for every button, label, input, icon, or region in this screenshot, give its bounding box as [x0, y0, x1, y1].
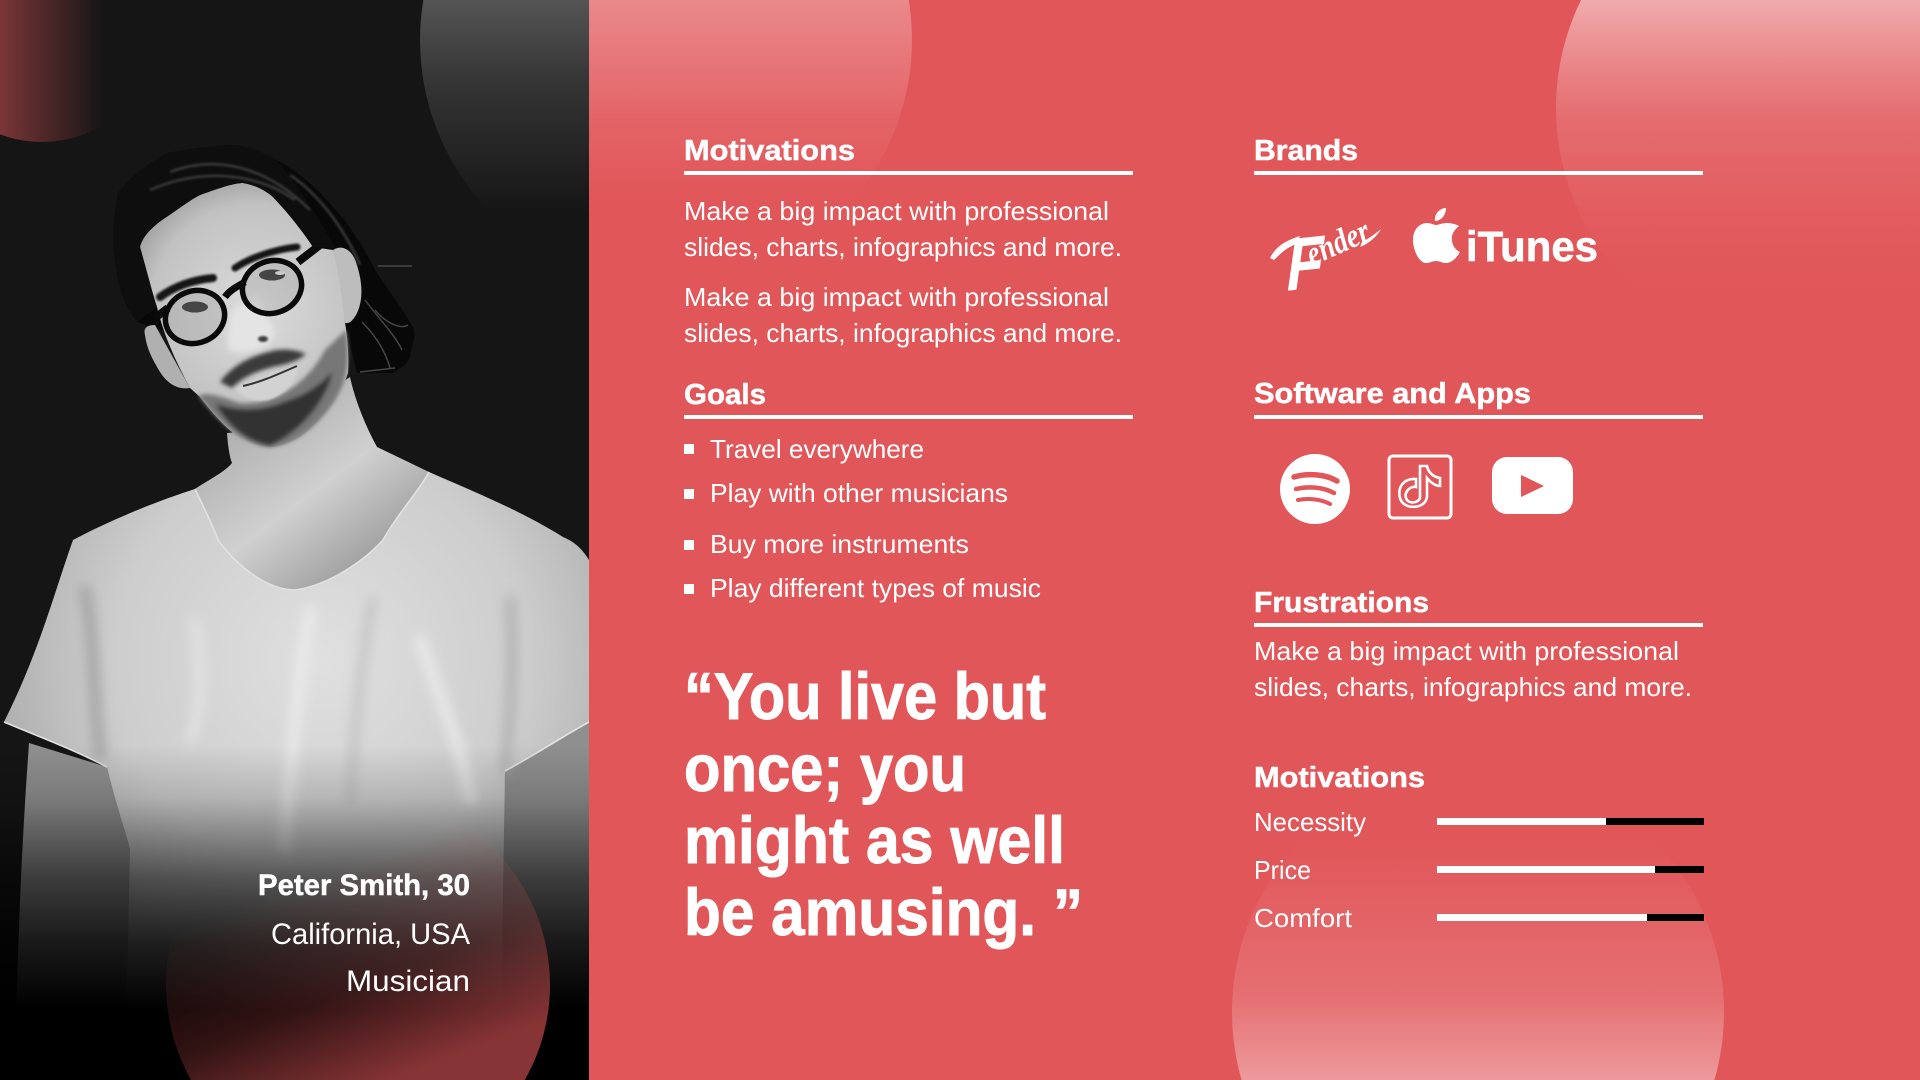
section: motivations text: slides, charts, infographics and more. — [684, 318, 1122, 348]
decorative circle: top right — [1556, 0, 1920, 354]
person details — [258, 869, 470, 998]
icon: Spotify — [1280, 454, 1350, 524]
heading: Software and Apps — [1254, 378, 1531, 410]
quote: might as well — [684, 803, 1065, 877]
name: Peter Smith, 30 — [258, 869, 470, 902]
section: goals — [684, 379, 1133, 603]
neck — [195, 377, 429, 590]
photo: man in white t-shirt — [4, 145, 589, 1080]
logo: Fender — [1270, 212, 1381, 308]
section: brands — [1254, 135, 1703, 308]
t-shirt — [4, 472, 589, 1080]
apple glyph — [1413, 208, 1460, 263]
quote: “You live but — [684, 659, 1046, 733]
shirt folds — [85, 590, 512, 850]
bar: necessity — [1254, 807, 1704, 837]
solid black base — [0, 1009, 589, 1080]
glasses — [155, 245, 320, 352]
moustache — [220, 350, 306, 388]
section: motivations text — [684, 135, 1133, 348]
bottom black fade — [0, 745, 589, 1010]
bullet list: Buy more instruments — [710, 529, 969, 559]
arms — [15, 722, 589, 1080]
location: California, USA — [271, 918, 470, 951]
bar: comfort — [1254, 903, 1704, 933]
lower lip — [234, 366, 298, 400]
face — [140, 183, 348, 447]
bullet list — [684, 434, 1041, 603]
hair sheen — [150, 164, 360, 265]
icon: YouTube — [1492, 457, 1573, 514]
body text: Make a big impact with professional — [1254, 636, 1679, 666]
quote: once; you — [684, 731, 966, 805]
heading: Motivations — [684, 135, 855, 167]
bar: comfort: Comfort — [1254, 903, 1353, 933]
body text: Make a big impact with professional — [684, 196, 1109, 226]
panel: coral background — [589, 0, 1920, 1080]
decorative circle: top grey — [420, 0, 589, 274]
section: motivations text: Make a big impact with professional — [684, 282, 1109, 312]
mouth line — [243, 366, 297, 386]
decorative circle: bottom right — [1232, 766, 1724, 1080]
logo: iTunes — [1413, 208, 1598, 271]
nostril — [258, 336, 268, 342]
bullet list: Travel everywhere — [710, 434, 924, 464]
hair bun texture — [360, 266, 412, 372]
hair back — [113, 145, 414, 373]
bar: necessity: Necessity — [1254, 807, 1366, 837]
section: frustrations: slides, charts, infographics and more. — [1254, 672, 1692, 702]
heading: Brands — [1254, 135, 1358, 167]
bar: price — [1254, 855, 1704, 885]
decorative circle: top left red — [0, 0, 162, 142]
heading: Goals — [684, 379, 766, 411]
decorative circle: bottom red — [166, 793, 550, 1080]
section: motivations text: slides, charts, infographics and more. — [684, 232, 1122, 262]
section: frustrations — [1254, 587, 1703, 702]
logo: Fender: ender — [1300, 212, 1376, 273]
ear right — [333, 248, 361, 323]
panel: portrait — [0, 0, 589, 1080]
bullet list: Play different types of music — [710, 573, 1041, 603]
quote: be amusing. ” — [684, 875, 1083, 949]
portrait background — [0, 0, 589, 1080]
nose — [227, 295, 274, 352]
logo: iTunes: iTunes — [1466, 223, 1598, 271]
decorative circle: top centre on coral — [589, 0, 912, 286]
stubble — [198, 330, 348, 447]
hair front — [113, 145, 335, 322]
quote — [684, 659, 1083, 949]
bar: price: Price — [1254, 855, 1311, 885]
beard — [216, 372, 332, 445]
section: software and apps — [1254, 378, 1703, 524]
shirt seams — [4, 472, 589, 771]
occupation: Musician — [346, 965, 470, 998]
eyes — [182, 270, 285, 312]
heading: Frustrations — [1254, 587, 1429, 619]
icon: TikTok — [1389, 456, 1451, 518]
section: motivations bars — [1254, 762, 1704, 933]
eyebrows — [160, 247, 297, 297]
logo: Fender: F — [1282, 220, 1329, 308]
ear left — [144, 325, 190, 388]
heading: Motivations — [1254, 762, 1425, 794]
bullet list: Play with other musicians — [710, 478, 1008, 508]
